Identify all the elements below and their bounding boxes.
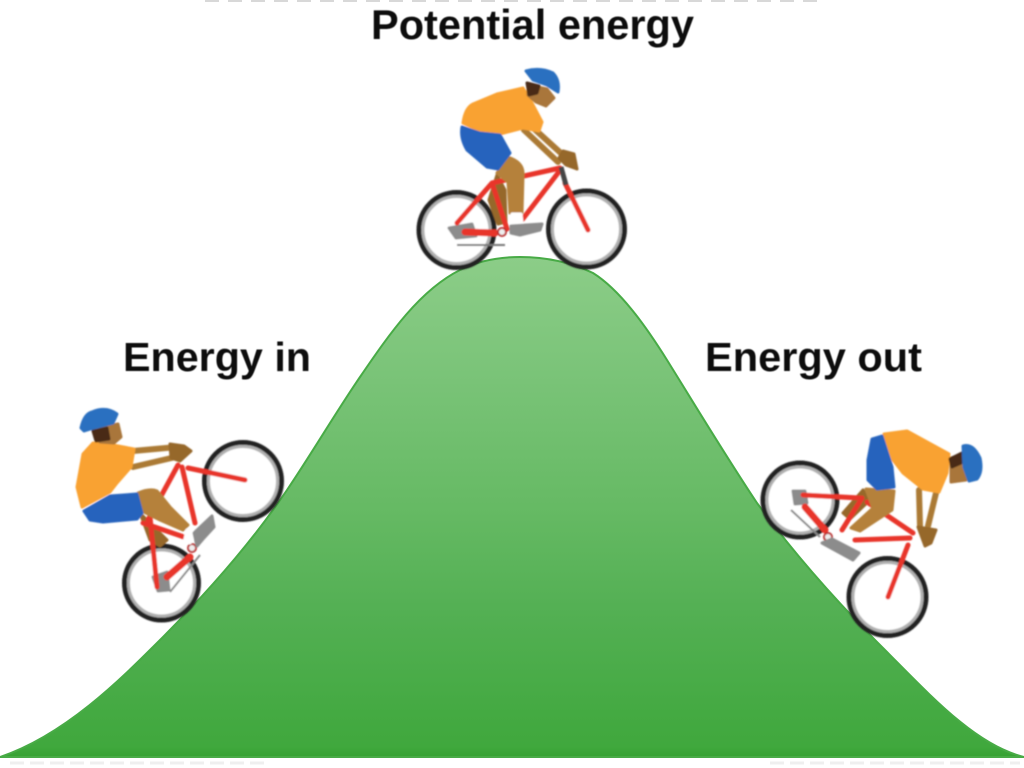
cyclist riding up the hill, energy in [77, 409, 282, 620]
heading: Potential energy: Potential energy [371, 1, 694, 48]
label: Energy out: Energy out [705, 334, 922, 380]
label: Energy in: Energy in [123, 334, 311, 380]
cyclist at the top of the hill [419, 69, 624, 268]
hill [0, 257, 1024, 757]
cyclist riding down the hill, energy out [763, 431, 981, 636]
